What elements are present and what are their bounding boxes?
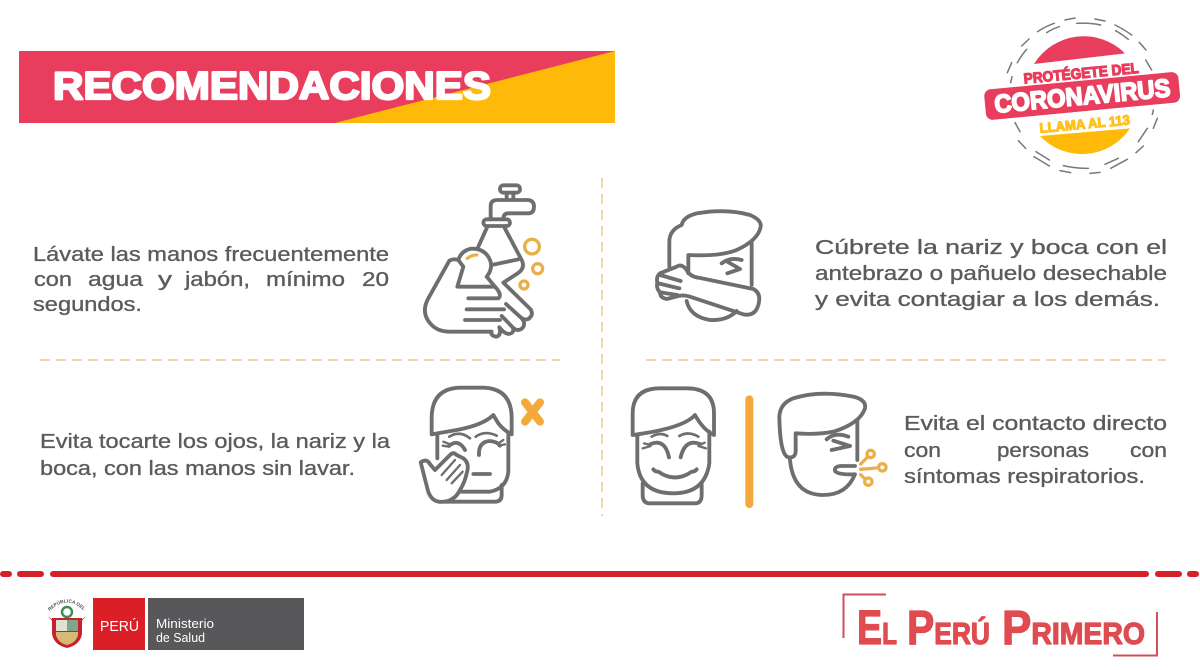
icon: covering mouth with forearm (657, 211, 761, 320)
text: no tocarse la cara: boca, con las manos sin lavar. (40, 457, 355, 480)
text: lavado de manos: 20 (362, 268, 389, 291)
badge: protégete del coronavirus: CORONAVIRUS (993, 74, 1172, 119)
separator bar (737, 399, 761, 504)
text: no tocarse la cara (40, 430, 391, 480)
logo: El Perú Primero (844, 594, 1157, 656)
text: evitar contacto directo: con (904, 439, 941, 462)
text: lavado de manos: Lávate las manos frecuentemente (33, 243, 389, 266)
text: lavado de manos (33, 243, 389, 316)
icon: hand washing under faucet (425, 185, 543, 337)
logo: escudo del Perú (48, 599, 86, 648)
logo: El Perú Primero: PERÚ (907, 602, 990, 655)
vertical divider (601, 178, 603, 516)
logo: Perú Ministerio de Salud: de Salud (156, 630, 205, 645)
text: evitar contacto directo: síntomas respiratorios. (904, 465, 1145, 488)
badge: protégete del coronavirus (984, 18, 1181, 173)
logo: El Perú Primero: PRIMERO (1002, 602, 1145, 655)
coughing face (779, 394, 865, 495)
text: cubrirse nariz y boca: y evita contagiar a los demás. (815, 288, 1160, 311)
text: evitar contacto directo: Evita el contacto directo (904, 412, 1167, 435)
text: lavado de manos: agua (88, 268, 144, 291)
text: no tocarse la cara: Evita tocarte los ojos, la nariz y la (40, 430, 391, 453)
text: cubrirse nariz y boca (815, 236, 1167, 311)
logo: Perú Ministerio de Salud: Ministerio (156, 616, 214, 631)
title banner (19, 51, 615, 123)
text: evitar contacto directo: personas (997, 439, 1089, 462)
text: lavado de manos: con (34, 268, 72, 291)
text: cubrirse nariz y boca: antebrazo o pañuelo desechable (815, 262, 1167, 285)
horizontal divider right (646, 359, 1166, 361)
text: evitar contacto directo (904, 412, 1167, 488)
text: lavado de manos: mínimo (266, 268, 345, 291)
text: lavado de manos: y (158, 268, 173, 291)
text: lavado de manos: segundos. (33, 293, 142, 316)
healthy face (633, 388, 714, 503)
footer rule (3, 571, 1196, 577)
horizontal divider left (40, 359, 560, 361)
badge: protégete del coronavirus: LLAMA AL 113 (1039, 112, 1131, 136)
text: evitar contacto directo: con (1130, 439, 1167, 462)
title banner: RECOMENDACIONES (53, 65, 491, 108)
logo: El Perú Primero: EL (857, 602, 897, 655)
logo: Perú Ministerio de Salud (93, 598, 304, 650)
text: lavado de manos: jabón, (184, 268, 250, 291)
logo: escudo del Perú: REPÚBLICA DEL PERÚ (48, 599, 84, 611)
text: cubrirse nariz y boca: Cúbrete la nariz y boca con el (815, 236, 1167, 259)
logo: Perú Ministerio de Salud: PERÚ (100, 618, 139, 635)
icon: touching face with unwashed hand (421, 388, 540, 502)
icon: healthy person and person coughing (633, 388, 886, 504)
badge: protégete del coronavirus: PROTÉGETE DEL (1023, 60, 1140, 88)
